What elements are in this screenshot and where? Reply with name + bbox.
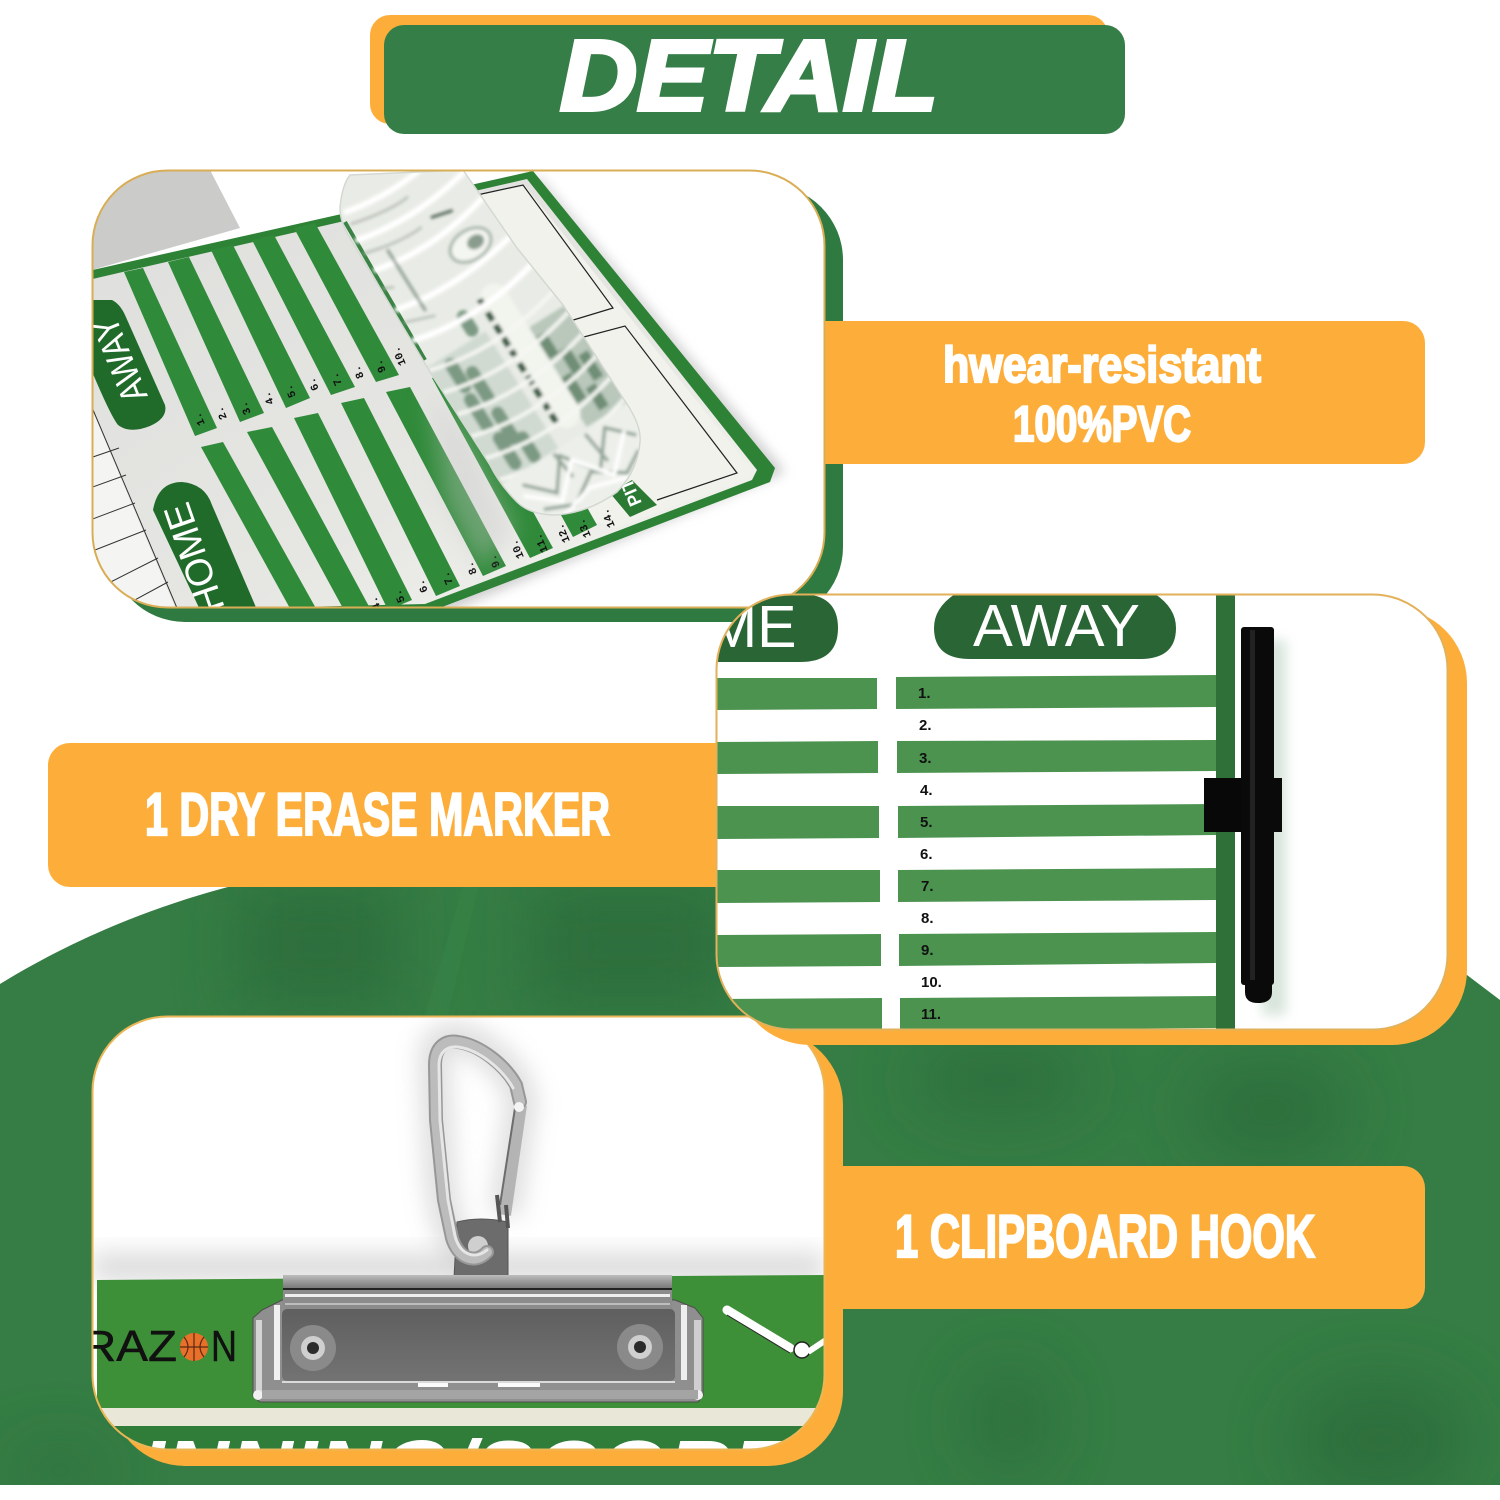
plate: [282, 1309, 675, 1381]
marker shadow: [1262, 640, 1286, 1015]
green side band: [1216, 594, 1235, 1030]
roster numbers: [918, 685, 942, 1023]
brand text: [94, 1330, 234, 1362]
row numbers: 12.: [555, 521, 574, 544]
board shadow: [430, 178, 785, 615]
row numbers: 9.: [373, 357, 390, 374]
pit box: [610, 480, 657, 517]
flanges: [253, 1300, 703, 1402]
carabiner: [435, 1042, 524, 1278]
row numbers: 7.: [329, 370, 346, 387]
marker: [1204, 627, 1282, 1003]
top bar: [283, 1275, 672, 1288]
stripes: [124, 223, 597, 612]
dark streaks, left: [431, 317, 546, 469]
row numbers: 13.: [576, 516, 595, 539]
label: dry erase marker: [48, 743, 740, 887]
soft shadows: [92, 1252, 825, 1282]
row numbers: 6.: [306, 375, 323, 392]
panel border: marker: [716, 594, 1448, 1030]
home pill: ME: [708, 594, 796, 660]
panel: marker on roster: [700, 593, 1448, 1032]
ribs: [343, 172, 626, 482]
roster numbers: 3.: [919, 750, 932, 767]
tab: [454, 1219, 508, 1278]
grey surface: [92, 170, 240, 270]
away pill: AWAY: [84, 311, 155, 408]
label: clipboard hook: [800, 1166, 1425, 1309]
board: PIT: [616, 476, 646, 509]
row numbers: 1.: [192, 410, 209, 427]
home pill: HOME: [157, 497, 234, 619]
row numbers: [192, 344, 619, 611]
panel shadow: orange offset bottom: [110, 1030, 843, 1466]
row numbers: 8.: [464, 559, 481, 576]
bat icon: [727, 1310, 826, 1358]
water tone: [426, 331, 560, 487]
roster numbers: 5.: [920, 814, 933, 831]
panel shadow: green offset: [110, 185, 843, 622]
roster numbers: 2.: [919, 717, 932, 734]
row numbers: 9.: [487, 552, 504, 569]
row numbers: 14.: [600, 506, 619, 529]
home pill: [718, 596, 838, 662]
board: [84, 171, 775, 619]
bottle shadow: [430, 390, 515, 570]
row numbers: 5.: [392, 587, 409, 604]
row numbers: 6.: [415, 577, 432, 594]
away pill: AWAY: [973, 593, 1140, 659]
label text: hwear-resistant: [943, 337, 1261, 393]
brand text: RAZ: [82, 1322, 177, 1371]
row numbers: 8.: [351, 363, 368, 380]
panel border: water bottle: [92, 170, 824, 608]
roster stripes: [716, 675, 1216, 1032]
row numbers: 10.: [391, 344, 410, 367]
away pill: [934, 593, 1176, 659]
crinkled base: [502, 426, 638, 510]
row numbers: 4.: [368, 594, 385, 611]
panel: water bottle on board: [94, 172, 824, 606]
row numbers: 5.: [283, 382, 300, 399]
label text: 1 CLIPBOARD HOOK: [895, 1203, 1315, 1270]
roster numbers: 6.: [920, 846, 933, 863]
panel: clipboard hook photo: [94, 1018, 824, 1448]
roster numbers: 10.: [921, 974, 942, 991]
roster numbers: 4.: [920, 782, 933, 799]
roster numbers: 11.: [921, 1006, 941, 1023]
panel shadow: orange offset middle: [735, 608, 1467, 1045]
water bottle: [339, 172, 641, 516]
brand text: N: [211, 1322, 237, 1371]
roster numbers: 9.: [921, 942, 934, 959]
title: DETAIL: [560, 20, 938, 132]
row numbers: 4.: [261, 389, 278, 406]
row numbers: 11.: [533, 531, 552, 554]
panel border: clipboard hook: [92, 1016, 824, 1450]
background: green arc: [0, 887, 1500, 1485]
green clipboard edge: [97, 1275, 824, 1448]
roster numbers: 8.: [921, 910, 934, 927]
bubble: [447, 224, 494, 266]
label: wear resistant: [800, 321, 1425, 464]
roster numbers: 1.: [918, 685, 931, 702]
rivets: [290, 1324, 663, 1371]
home pill: [153, 482, 256, 606]
board edge through bottle: [345, 222, 425, 360]
roster numbers: 7.: [921, 878, 934, 895]
label text: 1 DRY ERASE MARKER: [145, 781, 610, 848]
row numbers: 7.: [440, 569, 457, 586]
row numbers: 3.: [238, 399, 255, 416]
capsule centre: [478, 286, 582, 425]
header: detail banner: [370, 15, 1125, 134]
dark mottling, right: [536, 332, 610, 412]
row numbers: 10.: [509, 537, 528, 560]
away pill: [94, 300, 166, 430]
row numbers: 2.: [214, 404, 231, 421]
metal clip: [253, 1275, 703, 1402]
label text: 100%PVC: [1013, 396, 1191, 452]
